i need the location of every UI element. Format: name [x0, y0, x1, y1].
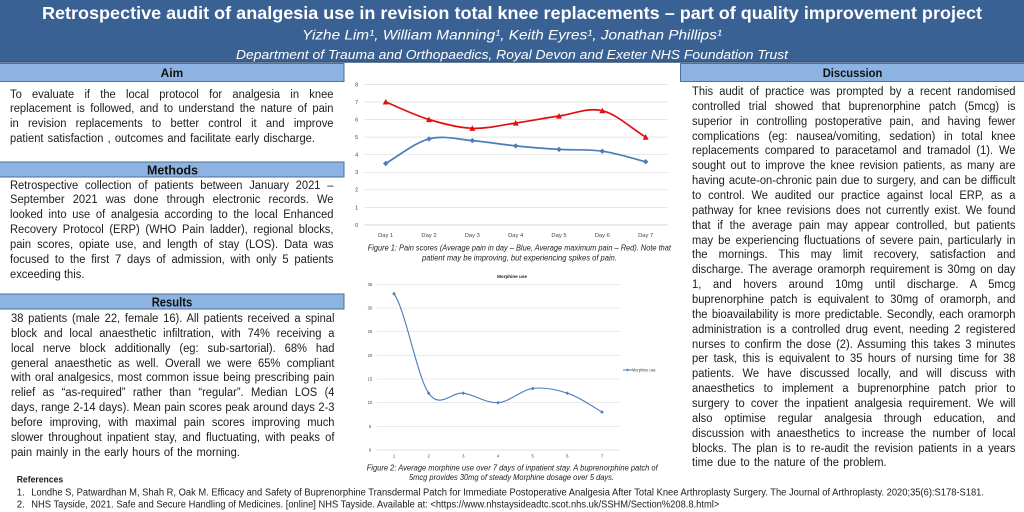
text block: methods: September 2021 was done through electronic records. We [10, 194, 333, 206]
header banner [0, 0, 1024, 63]
x axis labels: 7 [601, 453, 604, 458]
y axis labels: 5 [355, 135, 358, 141]
text block: discussion: This audit of practice was prompted by a recent randomised [692, 86, 1015, 98]
y axis labels: 7 [355, 100, 358, 106]
text block: results: pain mainly in the early hours of the morning. [11, 447, 240, 459]
text block: discussion: controlled trial showed that buprenorphine patch (5mcg) is [692, 101, 1015, 113]
text block: discussion [692, 86, 1016, 469]
text block: discussion: may be experiencing fluctuations of severe pain, particularly in [692, 235, 1015, 247]
references: 1. [17, 488, 25, 498]
text block: discussion: sought out to improve the knee revision patients, as many are [692, 160, 1015, 172]
chart title: Morphine use [497, 274, 527, 279]
x axis labels: Day 7 [638, 233, 653, 239]
y axis labels: 6 [355, 117, 358, 123]
text block: discussion: the bioavailability is more predictable. Secondly, each oramorph [692, 309, 1015, 321]
text block: discussion: discussion with anaesthetics to increase the number of local [692, 428, 1015, 440]
x axis labels: Day 1 [378, 233, 393, 239]
y axis labels [355, 82, 358, 229]
text block: aim: patient satisfaction , outcomes and facilitate early discharge. [10, 133, 315, 145]
heading: results: Results [152, 296, 192, 310]
text block: discussion: buprenorphine patch is equivalent to 30mg of oramorph, and [692, 294, 1015, 306]
text block: aim: replacement is followed, and to understand the nature of pain [10, 103, 333, 115]
heading: discussion [680, 64, 1024, 82]
text block: discussion: discharge. The average oramorph requirement is 30mg on day [692, 264, 1015, 276]
y axis labels: 2 [355, 188, 358, 194]
text block: results: slower throughout inpatient stay, and fluctuating, with peaks of [11, 432, 334, 444]
references: NHS Tayside, 2021. Safe and Secure Handling of Medicines. [online] NHS Tayside. Available at: <https://www.nhstaysideadtc.scot.nhs.uk/SSHM/Section%208.8.html> [31, 500, 720, 511]
x axis labels: Day 6 [595, 233, 610, 239]
x axis labels: Day 2 [421, 233, 437, 239]
text block: discussion: replacements compared to paracetamol and tramadol (1). We [692, 145, 1015, 157]
series: average pain (blue) [383, 136, 648, 166]
x axis labels: 6 [566, 453, 569, 458]
heading: results [0, 294, 344, 310]
text block: discussion: pathway for knee revisions does not currently exist. We found [692, 205, 1015, 217]
caption: figure 1: Figure 1: Pain scores (Average pain in day – Blue, Average maximum pain – Red). Note that [368, 242, 672, 252]
y axis labels: 0 [355, 223, 358, 229]
heading: aim: Aim [161, 68, 183, 80]
text block: discussion: also optimise regular analgesia through education, and [692, 413, 1015, 425]
authors: Yizhe Lim¹, William Manning¹, Keith Eyres¹, Jonathan Phillips¹ [302, 26, 722, 42]
text block: methods: Retrospective collection of patients between January 2021 – [10, 180, 333, 192]
x axis labels [378, 233, 653, 239]
y axis labels: 0 [369, 448, 372, 452]
y axis labels: 25 [368, 329, 373, 334]
references [17, 475, 984, 511]
y axis labels: 15 [368, 376, 373, 382]
text block: discussion: the mornings. This may limit recovery, satisfaction and [692, 249, 1015, 261]
department: Department of Trauma and Orthopaedics, Royal Devon and Exeter NHS Foundation Trust [236, 47, 789, 62]
text block: discussion: having acute-on-chronic pain due to surgery, and can be difficult [692, 175, 1015, 187]
text block: discussion: nurses to confirm the dose (2). Assuming this takes 3 minutes [692, 339, 1015, 351]
x axis labels [393, 453, 604, 458]
references: 2. [17, 500, 25, 511]
line chart: pain scores [355, 82, 668, 239]
y axis labels: 20 [368, 353, 373, 358]
x axis labels: Day 3 [465, 233, 480, 239]
x axis labels: Day 5 [551, 233, 567, 239]
text block: discussion: surgery to cover the inpatient analgesia requirement. We will [692, 398, 1015, 410]
text block: aim: in revision replacements to better control it and improve [10, 118, 333, 130]
y axis labels: 3 [355, 170, 358, 176]
y axis labels: 35 [368, 282, 373, 287]
y axis labels: 1 [355, 205, 358, 211]
text block: discussion: administration is a controlled drug event, needing 2 registered [692, 324, 1015, 336]
text block: methods [10, 180, 334, 281]
line chart: morphine use [368, 274, 656, 458]
text block: discussion: per task, this is equivalent to 35 hours of nursing time for 38 [692, 353, 1015, 365]
caption: figure 2: 5mcg provides 30mg of steady Morphine dosage over 5 days. [409, 472, 614, 482]
text block: results: with oral analgesics, most common issue being prescribing pain [11, 372, 334, 384]
text block: discussion: blocks. The plan is to re-audit the revision patients in a years [692, 443, 1015, 455]
text block: methods: exceeding this. [10, 269, 84, 281]
text block: discussion: anaesthetics to implement a buprenorphine patch prior to [692, 383, 1015, 395]
heading: methods [0, 162, 344, 178]
text block: discussion: time due to the nature of the problem. [692, 457, 887, 469]
heading: discussion: Discussion [823, 68, 882, 80]
heading: methods: Methods [147, 164, 198, 178]
text block: results: 38 patients (male 22, female 16). All patients received a spinal [11, 313, 334, 325]
series: average maximum pain (red) [383, 99, 649, 140]
text block: results: local nerve block additionally (eg: sub-sartorial). 68% had [11, 343, 334, 355]
title: Retrospective audit of analgesia use in revision total knee replacements – part of quality improvement project [42, 3, 982, 23]
text block: discussion: to control. We audited our practice against local ERP, as a [692, 190, 1015, 202]
text block: discussion: complications (eg: nausea/vomiting, sedation) in total knee [692, 131, 1015, 143]
text block: results: days, range 2-14 days). Mean pain scores peak around days 2-3 [11, 402, 334, 414]
text block: aim [10, 88, 333, 145]
text block: discussion: patients. We have discussed locally, and will discuss with [692, 368, 1015, 380]
y axis labels: 10 [368, 400, 373, 405]
legend: Morphine use [632, 368, 656, 372]
text block: methods: focused to the first 7 days of admission, with only 5 patients [10, 254, 333, 266]
x axis labels: Day 4 [508, 233, 524, 239]
caption: figure 1: patient may be improving, but experiencing spikes of pain. [421, 252, 617, 262]
x axis labels: 5 [532, 453, 535, 458]
text block: results: general anaesthetic as well. Overall we were 65% compliant [11, 358, 334, 370]
references: References [17, 475, 63, 485]
x axis labels: 1 [393, 453, 396, 458]
text block: discussion: superior in controlling postoperative pain, and having fewer [692, 116, 1015, 128]
text block: methods: pain scores, opiate use, and length of stay (LOS). Data was [10, 239, 333, 251]
text block: results: relief as “as-required” rather than “regular”. Median LOS (4 [11, 387, 334, 399]
caption: figure 1 [368, 242, 672, 262]
caption: figure 2 [367, 462, 659, 482]
text block: discussion: that if the average pain may appear controlled, but patients [692, 220, 1015, 232]
text block: discussion: 1, and hovers around 10mg until discharge. A 5mcg [692, 279, 1015, 291]
text block: results: block and local anaesthetic infiltration, with 74% receiving a [11, 328, 334, 340]
x axis labels: 2 [428, 453, 431, 458]
heading: aim [0, 64, 344, 82]
text block: methods: Recovery Protocol (ERP) (WHO Pain ladder), regional blocks, [10, 224, 333, 236]
y axis labels [368, 282, 373, 452]
caption: figure 2: Figure 2: Average morphine use over 7 days of inpatient stay. A buprenorphine patch of [367, 462, 659, 472]
y axis labels: 8 [355, 82, 358, 88]
text block: aim: To evaluate if the local protocol for analgesia in knee [10, 88, 333, 100]
text block: results [11, 313, 334, 459]
y axis labels: 30 [368, 306, 373, 310]
text block: results: before improving, with maximal pain scores improving much [11, 417, 334, 429]
x axis labels: 3 [462, 453, 465, 458]
series: morphine use [392, 292, 604, 414]
x axis labels: 4 [497, 453, 500, 458]
references: Londhe S, Patwardhan M, Shah R, Oak M. Efficacy and Safety of Buprenorphine Transdermal Patch for Immediate Postoperative Analgesia After Total Knee Arthroplasty Surgery. The Journal of Arthroplasty. 2020;35(6):S178-S181. [31, 488, 984, 498]
y axis labels: 4 [355, 153, 358, 159]
y axis labels: 5 [369, 424, 372, 429]
text block: methods: looked into use of analgesia according to the local Enhanced [10, 209, 333, 221]
